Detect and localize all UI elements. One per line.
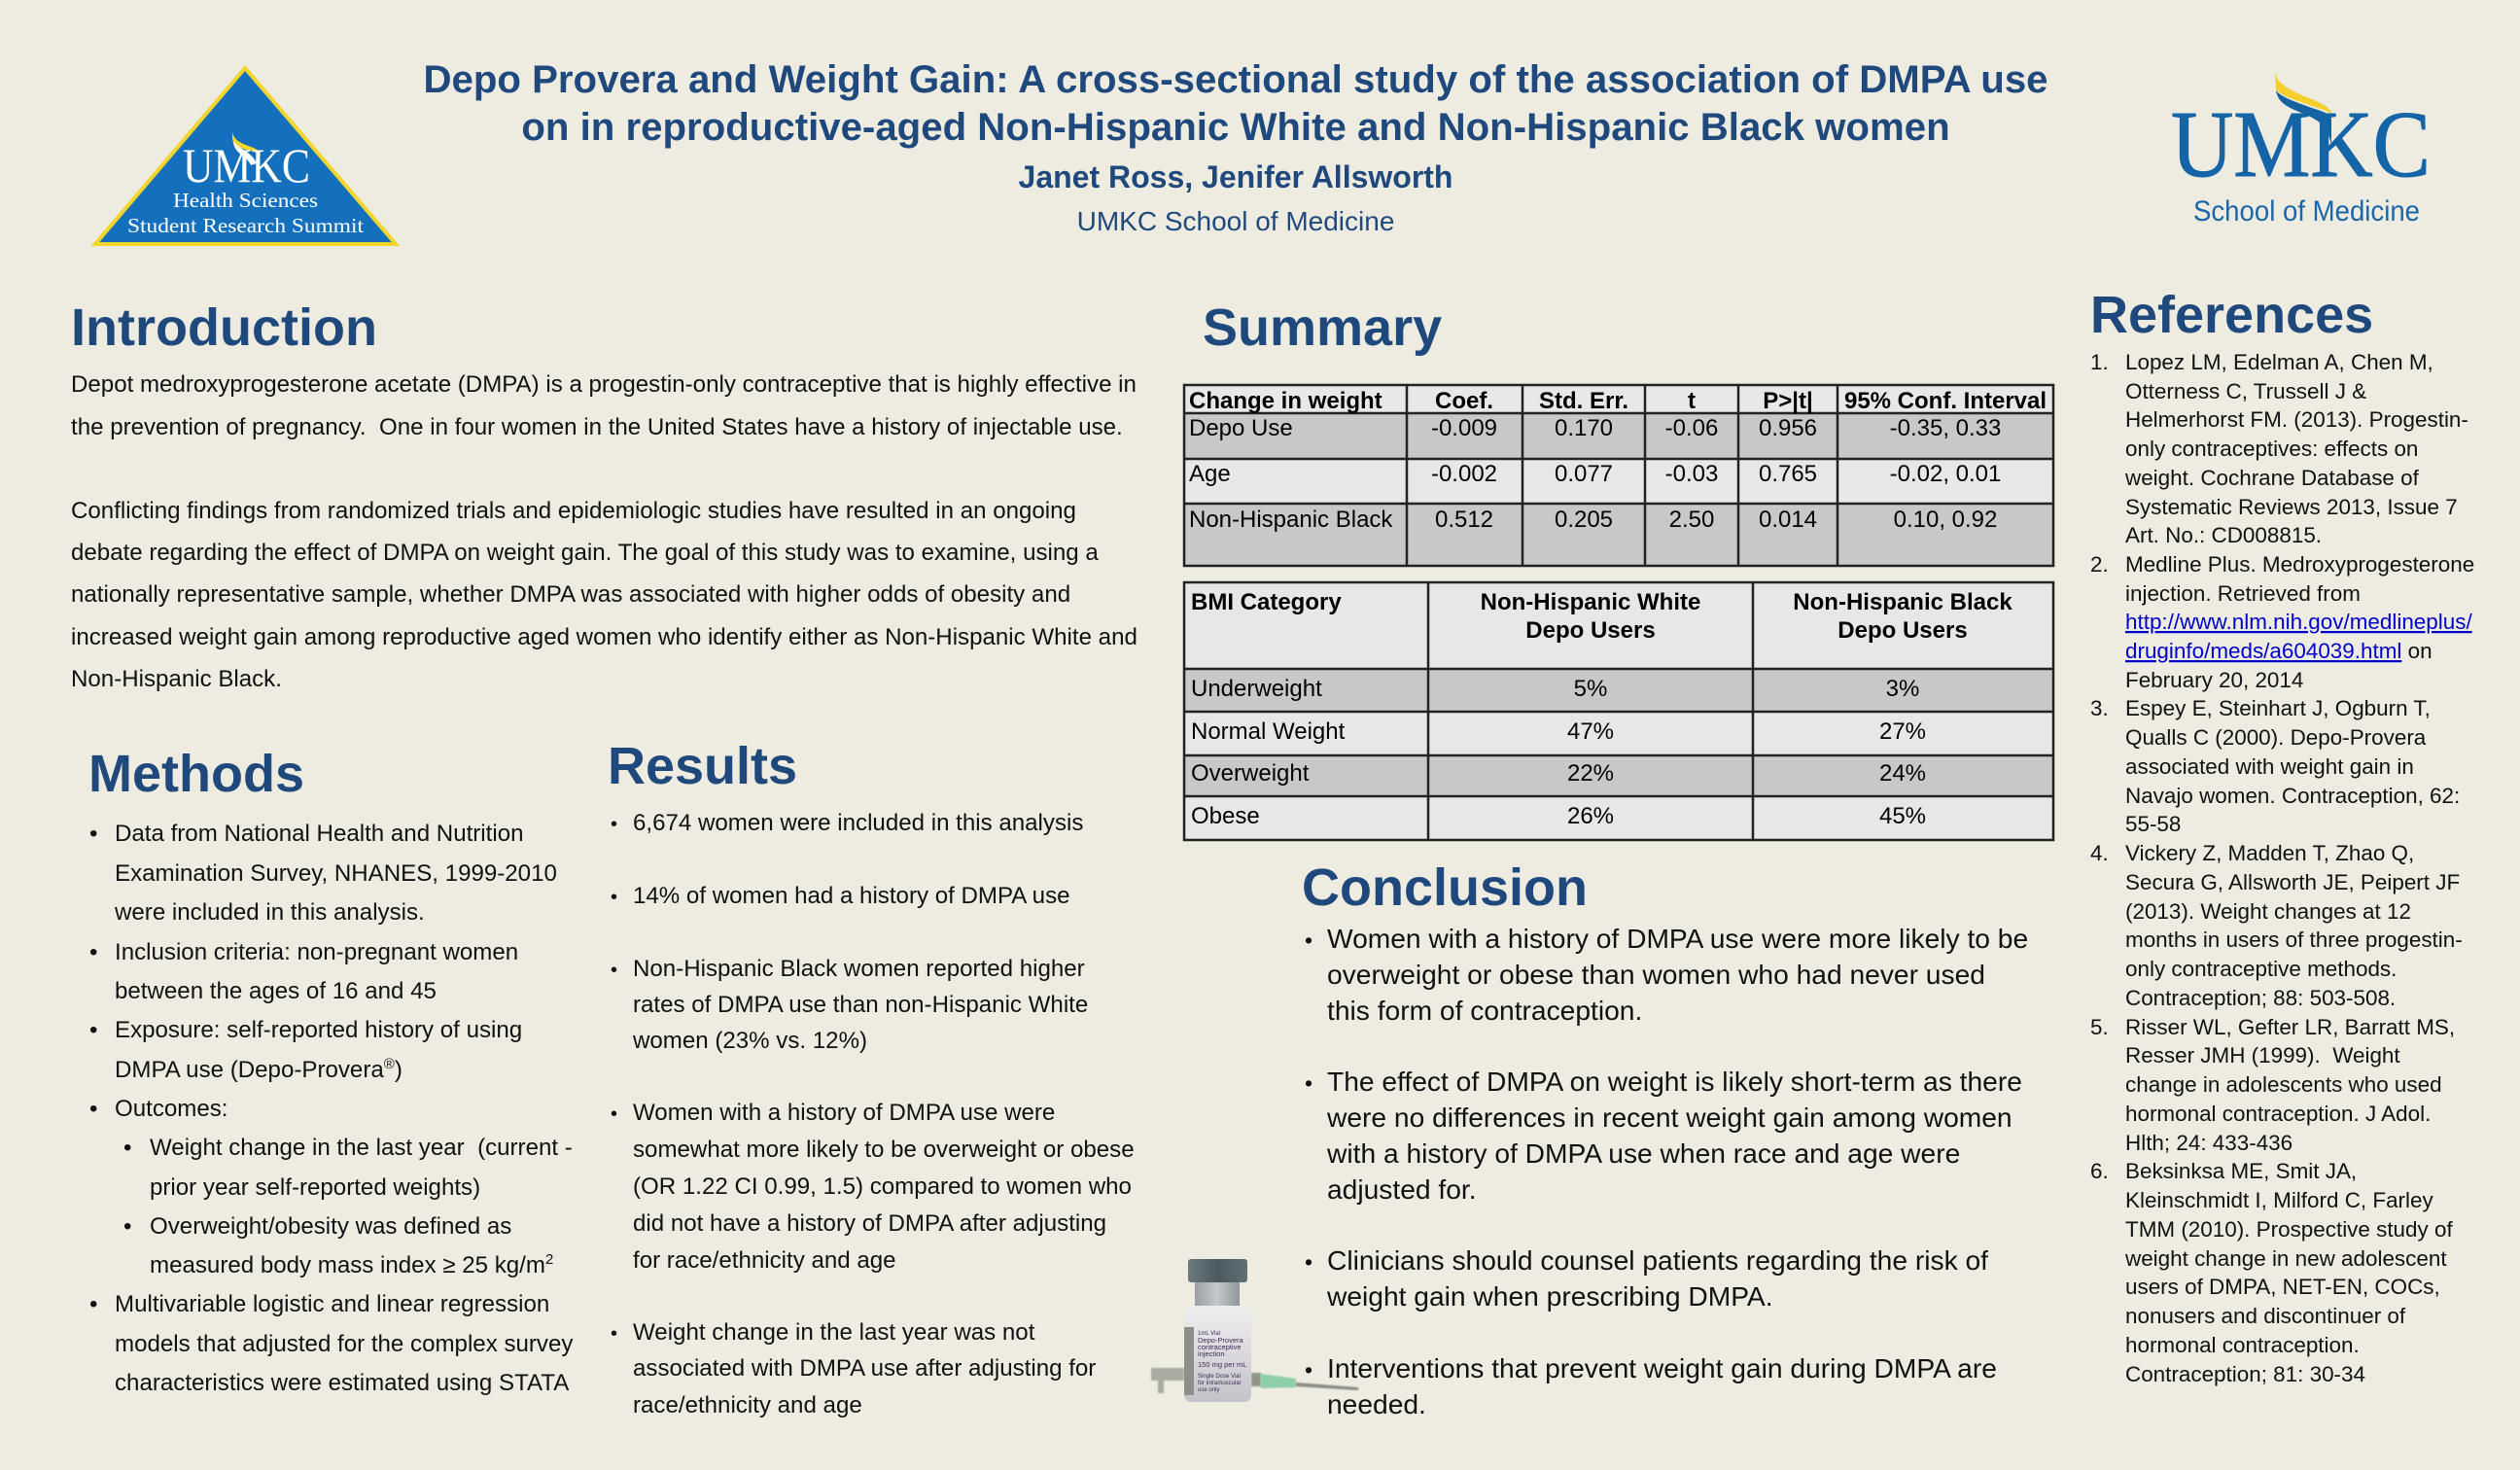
heading: summary: Summary — [1203, 298, 1442, 357]
table: BMI category by group: 45% — [1879, 803, 1926, 829]
text block: conclusion list: Clinicians should counsel patients regarding the risk of — [1327, 1244, 1988, 1276]
text block: introduction body: Conflicting findings from randomized trials and epidemiologic studies have resulted in an ongoing — [71, 498, 1076, 524]
text block: introduction body: increased weight gain among reproductive aged women who identify either as Non-Hispanic White and — [71, 624, 1138, 650]
text block: reference list: injection. Retrieved from — [2125, 581, 2361, 606]
title: on in reproductive-aged Non-Hispanic White and Non-Hispanic Black women — [521, 105, 1950, 149]
table: BMI category by group: Underweight — [1191, 676, 1322, 702]
text block: results list: • — [611, 814, 617, 835]
table: BMI category by group: Obese — [1191, 803, 1260, 829]
text block: reference list: February 20, 2014 — [2125, 668, 2303, 692]
text block: reference list: 6. — [2090, 1159, 2109, 1183]
text block: reference list: nonusers and discontinuer of — [2125, 1304, 2406, 1328]
authors: Janet Ross, Jenifer Allsworth — [1019, 159, 1452, 194]
table: change in weight regression: -0.009 — [1431, 415, 1497, 441]
table: change in weight regression: 0.077 — [1555, 461, 1613, 487]
text block: reference list: Qualls C (2000). Depo-Provera — [2125, 725, 2427, 750]
text block: results list: • — [611, 1323, 617, 1345]
table: change in weight regression: -0.02, 0.01 — [1890, 461, 2001, 487]
text block: methods list: Multivariable logistic and linear regression — [115, 1291, 549, 1317]
text block: methods list: 2 — [545, 1251, 553, 1268]
table: change in weight regression: Depo Use — [1189, 415, 1293, 441]
title: Depo Provera and Weight Gain: A cross-sectional study of the association of DMPA use — [423, 57, 2048, 101]
panel: results — [608, 737, 1135, 1418]
table: BMI category by group — [1184, 582, 2053, 840]
panel: summary — [1184, 298, 2053, 840]
icon: Depo-Provera vial and needle: contraceptive — [1198, 1343, 1242, 1351]
table: change in weight regression: 0.014 — [1759, 507, 1817, 533]
table: BMI category by group: Non-Hispanic White — [1481, 589, 1700, 615]
text block: results list: 6,674 women were included in this analysis — [633, 810, 1083, 836]
text block: methods list: • — [123, 1135, 131, 1161]
text block: results list: • — [611, 960, 617, 981]
logo: Student Research Summit triangle: UMKC — [183, 138, 310, 192]
table: change in weight regression: 0.10, 0.92 — [1894, 507, 1997, 533]
table: change in weight regression: -0.03 — [1665, 461, 1718, 487]
text block: conclusion list: • — [1305, 1249, 1312, 1275]
text block: results list: for race/ethnicity and age — [633, 1247, 896, 1274]
text block: methods list: • — [89, 1096, 97, 1122]
table: BMI category by group: Depo Users — [1838, 617, 1968, 644]
text block: conclusion list: weight gain when prescribing DMPA. — [1326, 1280, 1773, 1312]
text block: methods list: characteristics were estimated using STATA — [115, 1370, 570, 1396]
table: change in weight regression: 95% Conf. Interval — [1844, 388, 2047, 414]
text block: methods list: • — [123, 1213, 131, 1240]
text block: methods list: • — [89, 821, 97, 847]
text block: results list: associated with DMPA use after adjusting for — [633, 1355, 1096, 1382]
table: BMI category by group: BMI Category — [1191, 589, 1342, 615]
text block: methods list: were included in this analysis. — [114, 899, 425, 926]
logo: Student Research Summit triangle: Student Research Summit — [127, 214, 364, 237]
table: change in weight regression: Non-Hispanic Black — [1189, 507, 1393, 533]
text block: methods list: Exposure: self-reported history of using — [115, 1017, 522, 1043]
text block: conclusion list: • — [1305, 1070, 1312, 1096]
table: BMI category by group: 5% — [1574, 676, 1607, 702]
panel: introduction — [71, 298, 1138, 692]
text block: reference list: Contraception; 81: 30-34 — [2125, 1362, 2365, 1386]
text block: conclusion list: overweight or obese than women who had never used — [1327, 959, 1985, 990]
text block: reference list: hormonal contraception. J Adol. — [2125, 1102, 2431, 1126]
heading: references: References — [2090, 286, 2373, 344]
text block: results list: Women with a history of DMPA use were — [633, 1100, 1055, 1126]
text block: results list: rates of DMPA use than non-Hispanic White — [633, 992, 1088, 1018]
table: change in weight regression: 0.512 — [1435, 507, 1493, 533]
text block: reference list: Otterness C, Trussell J & — [2125, 379, 2366, 403]
text block: reference list: TMM (2010). Prospective study of — [2125, 1217, 2453, 1242]
table: BMI category by group: 27% — [1879, 718, 1926, 745]
text block: reference list: Kleinschmidt I, Milford C, Farley — [2125, 1188, 2433, 1212]
text block: results list: (OR 1.22 CI 0.99, 1.5) compared to women who — [633, 1173, 1132, 1200]
table: BMI category by group: Non-Hispanic Black — [1793, 589, 2012, 615]
table: BMI category by group: 3% — [1886, 676, 1919, 702]
panel: references — [2090, 286, 2474, 1386]
text block: reference list: change in adolescents who used — [2125, 1072, 2442, 1097]
table: change in weight regression: 0.170 — [1555, 415, 1613, 441]
text block: reference list: 5. — [2090, 1015, 2109, 1039]
table: change in weight regression: Coef. — [1435, 388, 1493, 414]
table: change in weight regression: -0.35, 0.33 — [1890, 415, 2001, 441]
panel: methods — [88, 745, 573, 1396]
text block: introduction body: the prevention of pregnancy. One in four women in the United States have a history of injectable use. — [71, 414, 1123, 440]
text block: conclusion list: Women with a history of DMPA use were more likely to be — [1327, 923, 2028, 954]
logo: Student Research Summit triangle: Health Sciences — [173, 189, 318, 212]
icon: Depo-Provera vial and needle: 150 mg per mL — [1198, 1360, 1246, 1369]
text block: reference list: hormonal contraception. — [2125, 1333, 2360, 1357]
text block: reference list: Contraception; 88: 503-508. — [2125, 986, 2396, 1010]
table: change in weight regression: 2.50 — [1669, 507, 1714, 533]
text block: reference list: associated with weight gain in — [2125, 754, 2414, 779]
text block: methods list: • — [89, 1291, 97, 1317]
table: BMI category by group: 22% — [1567, 760, 1614, 787]
table: change in weight regression: -0.06 — [1665, 415, 1718, 441]
text block: reference list: 3. — [2090, 696, 2109, 720]
text block: reference list: 1. — [2090, 350, 2109, 374]
text block: introduction body — [71, 371, 1138, 692]
text block: results list: Weight change in the last year was not — [633, 1319, 1035, 1346]
table: change in weight regression: 0.956 — [1759, 415, 1817, 441]
text block: methods list: ) — [395, 1057, 402, 1083]
table: change in weight regression: Age — [1189, 461, 1231, 487]
text block: results list: • — [611, 1103, 617, 1125]
text block: reference list: weight. Cochrane Database of — [2124, 466, 2420, 490]
text block: methods list: between the ages of 16 and 45 — [115, 978, 437, 1004]
text block: methods list — [89, 821, 573, 1396]
text block: reference list: 2. — [2090, 552, 2109, 577]
table: BMI category by group: Depo Users — [1525, 617, 1656, 644]
text block: reference list: users of DMPA, NET-EN, COCs, — [2125, 1275, 2440, 1299]
text block: reference list: months in users of three progestin- — [2125, 928, 2463, 952]
text block: conclusion list: The effect of DMPA on weight is likely short-term as there — [1327, 1066, 2022, 1097]
text block: conclusion list: this form of contraception. — [1327, 995, 1642, 1026]
text block: methods list: Outcomes: — [115, 1096, 228, 1122]
text block: conclusion list: • — [1305, 928, 1312, 953]
table: change in weight regression: Change in weight — [1189, 388, 1382, 414]
affiliation: UMKC School of Medicine — [1077, 206, 1394, 236]
text block: conclusion list: adjusted for. — [1327, 1173, 1477, 1205]
table: BMI category by group: 47% — [1567, 718, 1614, 745]
text block: reference list: Hlth; 24: 433-436 — [2125, 1131, 2292, 1155]
text block: introduction body: nationally representative sample, whether DMPA was associated with higher odds of obesity and — [71, 581, 1070, 608]
table: BMI category by group: Overweight — [1191, 760, 1310, 787]
text block: methods list: prior year self-reported weights) — [150, 1174, 480, 1201]
text block: reference list: Secura G, Allsworth JE, Peipert JF — [2125, 870, 2460, 894]
text block: results list: Non-Hispanic Black women reported higher — [633, 956, 1085, 982]
table: change in weight regression: 0.205 — [1555, 507, 1613, 533]
text block: reference list: Art. No.: CD008815. — [2125, 523, 2322, 547]
text block: reference list: weight change in new adolescent — [2124, 1246, 2447, 1271]
text block: reference list: only contraceptives: effects on — [2125, 437, 2418, 461]
text block: methods list: DMPA use (Depo-Provera — [115, 1057, 384, 1083]
text block: reference list: 55-58 — [2125, 812, 2181, 836]
text block: results list: somewhat more likely to be overweight or obese — [633, 1137, 1135, 1163]
text block: reference list: Medline Plus. Medroxyprogesterone — [2125, 552, 2474, 577]
heading: results: Results — [608, 737, 797, 795]
table: change in weight regression: 0.765 — [1759, 461, 1817, 487]
table: change in weight regression: t — [1688, 388, 1696, 414]
text block: conclusion list: needed. — [1327, 1388, 1426, 1419]
text block: reference list: http://www.nlm.nih.gov/medlineplus/ — [2125, 610, 2472, 634]
text block: results list: 14% of women had a history of DMPA use — [633, 883, 1070, 909]
text block: methods list: Inclusion criteria: non-pregnant women — [115, 939, 518, 965]
text block: introduction body: Non-Hispanic Black. — [71, 666, 282, 692]
text block: reference list: Espey E, Steinhart J, Ogburn T, — [2125, 696, 2431, 720]
text block: conclusion list: were no differences in recent weight gain among women — [1326, 1102, 2012, 1133]
table: change in weight regression: -0.002 — [1431, 461, 1497, 487]
text block: conclusion list — [1305, 923, 2028, 1419]
text block: methods list: Weight change in the last year (current - — [150, 1135, 573, 1161]
text block: reference list: Vickery Z, Madden T, Zhao Q, — [2125, 841, 2414, 865]
text block: reference list: Helmerhorst FM. (2013). Progestin- — [2125, 407, 2468, 432]
table: change in weight regression: P>|t| — [1763, 388, 1813, 414]
text block: methods list: Overweight/obesity was defined as — [150, 1213, 511, 1240]
text block: results list: race/ethnicity and age — [633, 1392, 862, 1418]
text block: reference list: Navajo women. Contraception, 62: — [2125, 784, 2460, 808]
icon: Depo-Provera vial and needle: use only — [1198, 1387, 1219, 1393]
icon: Depo-Provera vial and needle: Single Dose Vial — [1198, 1374, 1241, 1380]
panel: conclusion — [1302, 858, 2028, 1419]
text block: reference list: Risser WL, Gefter LR, Barratt MS, — [2125, 1015, 2455, 1039]
text block: results list: did not have a history of DMPA after adjusting — [633, 1210, 1106, 1237]
heading: introduction: Introduction — [71, 298, 377, 357]
text block: reference list: only contraceptive methods. — [2125, 957, 2397, 981]
text block: conclusion list: Interventions that prevent weight gain during DMPA are — [1327, 1352, 1997, 1383]
icon: Depo-Provera vial and needle — [1151, 1259, 1358, 1402]
logo: UMKC School of Medicine: UMKC — [2171, 92, 2431, 196]
text block: reference list: (2013). Weight changes at 12 — [2125, 899, 2411, 924]
text block: reference list: Systematic Reviews 2013, Issue 7 — [2125, 495, 2458, 519]
icon: Depo-Provera vial and needle: for intramuscular — [1198, 1381, 1242, 1386]
text block: methods list: measured body mass index ≥ 25 kg/m — [150, 1252, 545, 1278]
icon: Depo-Provera vial and needle: 1mL Vial — [1198, 1331, 1220, 1337]
text block: methods list: • — [89, 939, 97, 965]
text block: introduction body: debate regarding the effect of DMPA on weight gain. The goal of this study was to examine, using a — [71, 540, 1099, 566]
logo: UMKC School of Medicine — [2171, 73, 2431, 228]
text block: reference list: 4. — [2090, 841, 2109, 865]
text block: results list — [611, 810, 1135, 1418]
text block: reference list: Lopez LM, Edelman A, Chen M, — [2125, 350, 2433, 374]
table: change in weight regression: Std. Err. — [1539, 388, 1628, 414]
icon: Depo-Provera vial and needle: Depo-Provera — [1198, 1336, 1244, 1345]
logo: UMKC School of Medicine: School of Medicine — [2193, 195, 2420, 228]
text block: methods list: Data from National Health and Nutrition — [115, 821, 524, 847]
table: BMI category by group: 24% — [1879, 760, 1926, 787]
text block: conclusion list: • — [1305, 1357, 1312, 1382]
icon: Depo-Provera vial and needle: injection — [1198, 1349, 1225, 1358]
text block: methods list: • — [89, 1017, 97, 1043]
text block: conclusion list: with a history of DMPA use when race and age were — [1326, 1138, 1960, 1169]
logo: Student Research Summit triangle — [95, 68, 396, 244]
heading: conclusion: Conclusion — [1302, 858, 1588, 917]
table: BMI category by group: Normal Weight — [1191, 718, 1346, 745]
table: BMI category by group: 26% — [1567, 803, 1614, 829]
text block: methods list: models that adjusted for the complex survey — [115, 1331, 573, 1357]
text block: reference list — [2090, 350, 2474, 1386]
text block: reference list: druginfo/meds/a604039.html on — [2125, 639, 2432, 663]
text block: results list: • — [611, 887, 617, 908]
table: change in weight regression — [1184, 385, 2053, 566]
heading: methods: Methods — [88, 745, 304, 803]
text block: reference list: Resser JMH (1999). Weight — [2125, 1043, 2400, 1068]
text block: reference list: Beksinksa ME, Smit JA, — [2125, 1159, 2357, 1183]
text block: methods list: Examination Survey, NHANES, 1999-2010 — [115, 860, 557, 887]
text block: introduction body: Depot medroxyprogesterone acetate (DMPA) is a progestin-only contraceptive that is highly effective in — [71, 371, 1137, 398]
text block: results list: women (23% vs. 12%) — [632, 1028, 867, 1054]
text block: methods list: ® — [384, 1056, 395, 1072]
title — [423, 57, 2048, 149]
